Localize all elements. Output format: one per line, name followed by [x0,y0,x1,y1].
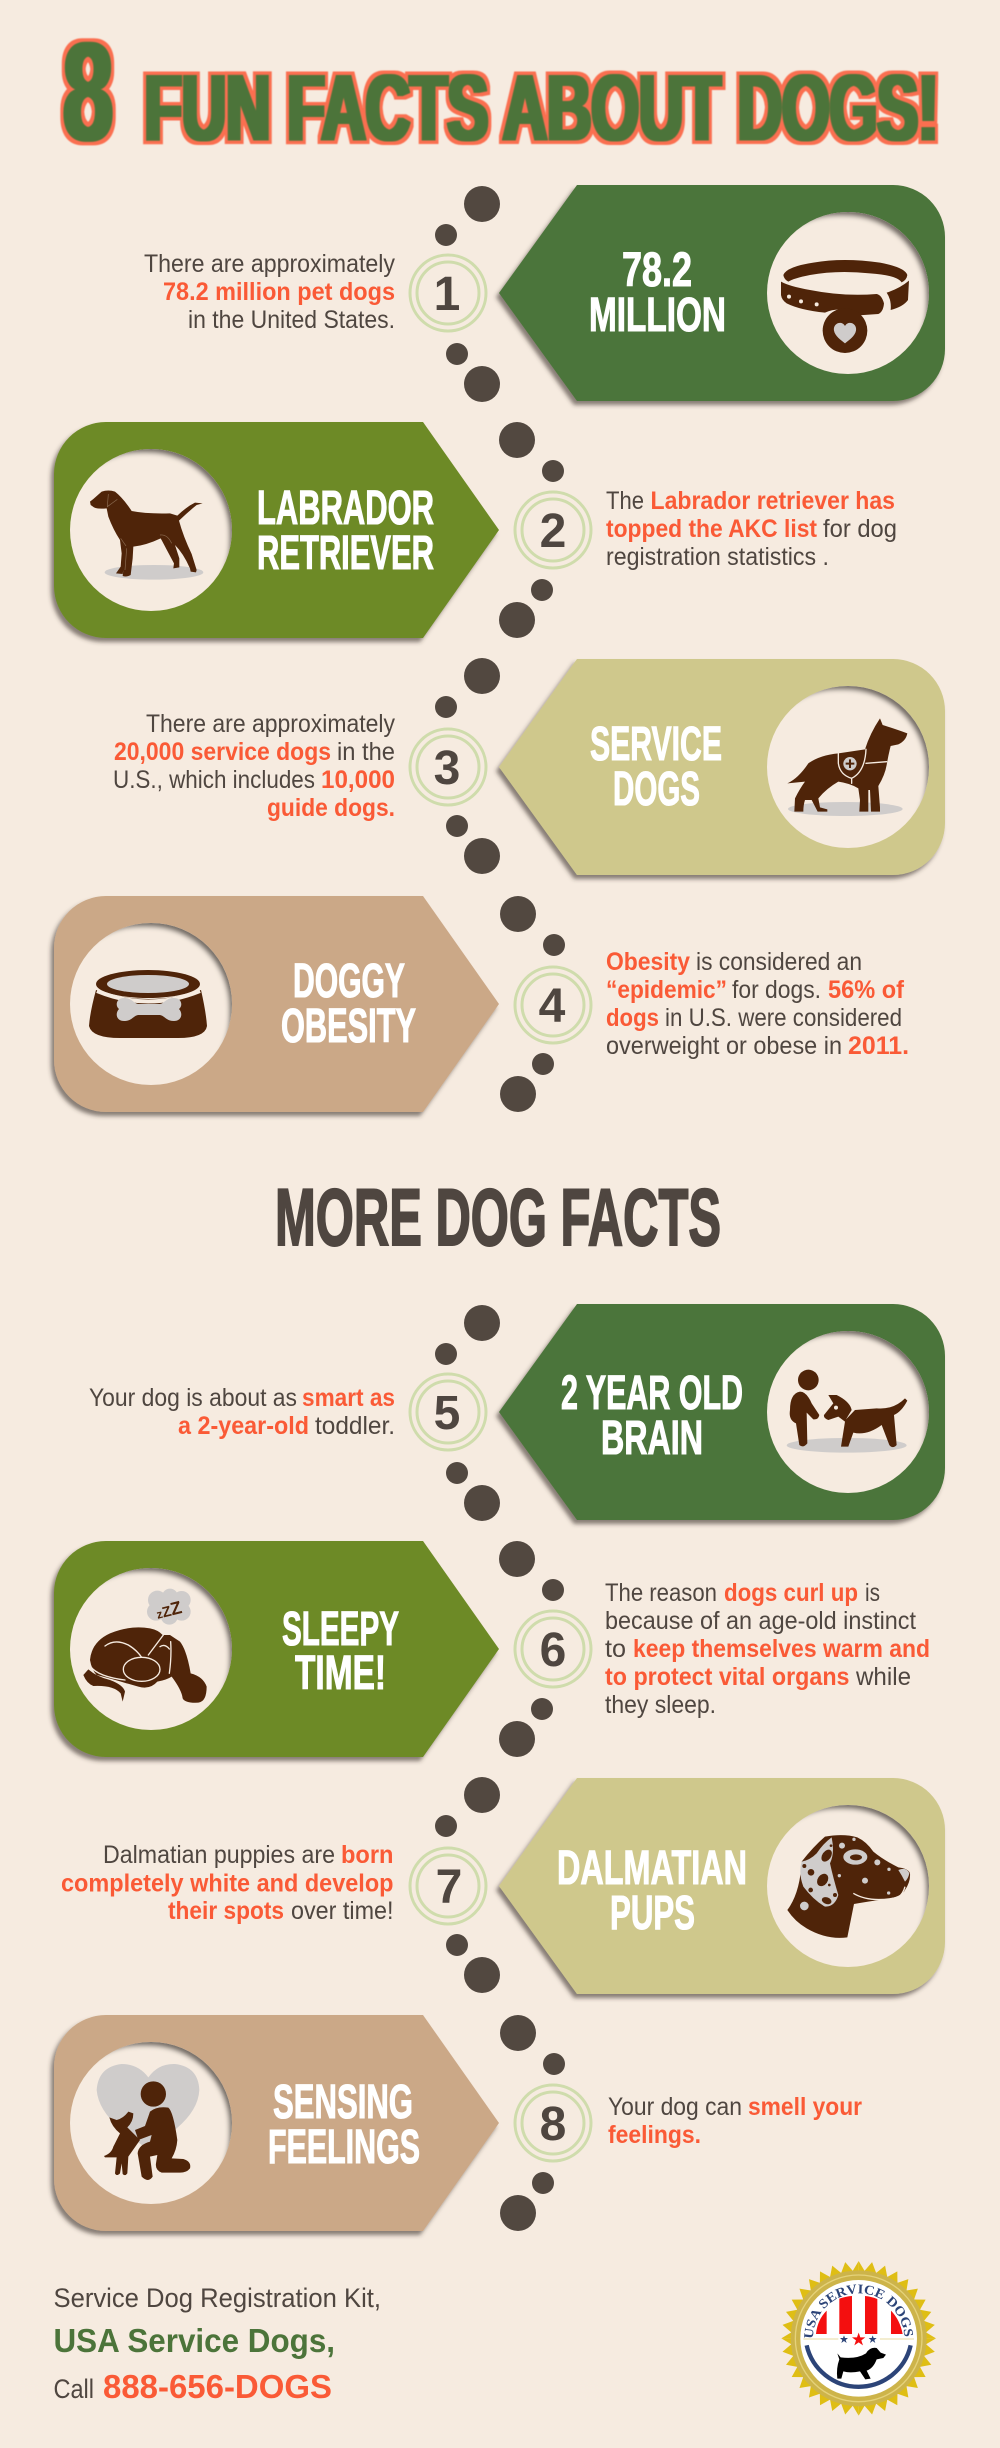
icon: child and dog [787,1370,907,1453]
panel label: PUPS [610,1887,695,1940]
dots 6 [499,1541,564,1757]
fact text 3: guide dogs. [267,794,395,822]
fact text 4: in U.S. were considered [665,1004,902,1032]
fact text 2: topped the AKC list [606,515,818,543]
fact text 6: while [855,1663,911,1691]
title [63,13,938,170]
fact text 4: 2011. [848,1032,909,1060]
panel: sensing feelings [54,2015,499,2231]
panel: 2 year old brain [499,1304,945,1520]
panel label: OBESITY [281,1000,416,1053]
dots 4 [500,896,565,1112]
panel: service dogs [499,659,945,875]
panel: 78.2 million [499,185,945,401]
number badge 8 [515,2085,591,2161]
panel label [590,718,722,816]
footer contact text: USA Service Dogs, [54,2322,335,2359]
fact text 2: for dog [823,515,897,543]
fact text 6: The reason [605,1579,717,1607]
panel: sleepy time [54,1541,499,1757]
fact text 8: smell your [748,2093,862,2121]
panel label: TIME! [295,1647,386,1700]
fact text 8: Your dog can [608,2093,742,2121]
fact text 1 [144,250,395,334]
fact text 6: they sleep. [605,1691,716,1719]
panel label [257,482,434,580]
panel label [557,1842,747,1940]
number badge 1: 1 [434,268,460,321]
panel label: BRAIN [601,1412,703,1465]
fact text 7: Dalmatian puppies are [103,1841,335,1869]
panel label [282,1603,399,1700]
number badge 7 [410,1848,486,1924]
fact text 2: The [606,487,644,515]
number badge 6: 6 [540,1624,566,1677]
fact text 3: in the [337,738,395,766]
number badge 8: 8 [540,2098,566,2151]
number badge 2 [515,492,591,568]
fact text 6: to [605,1635,626,1663]
fact text 7: over time! [291,1897,394,1925]
icon: labrador [90,490,203,580]
fact text 3: U.S., which includes [113,766,315,794]
fact text 1: There are approximately [144,250,395,278]
dots 3 [435,658,500,874]
icon: sleeping dog: zZZ [154,1597,184,1623]
panel label: RETRIEVER [257,527,434,580]
fact text 4: for dogs. [732,976,821,1004]
fact text 2: registration statistics . [606,543,829,571]
panel: doggy obesity [54,896,499,1112]
icon: sleeping dog [83,1589,207,1703]
fact text 8 [608,2093,862,2149]
fact text 2 [606,487,897,571]
panel label: 78.2 [622,244,692,297]
fact text 5: smart as [302,1384,395,1412]
fact text 5: toddler. [315,1412,395,1440]
number badge 1 [410,255,486,331]
panel label: FEELINGS [268,2121,420,2174]
number badge 3: 3 [434,742,460,795]
number badge 4 [515,967,591,1043]
number badge 3 [410,729,486,805]
icon: bowl [89,970,207,1038]
fact text 4: is considered an [696,948,862,976]
fact text 3 [113,710,395,822]
dots 7 [435,1777,500,1993]
footer contact text: Service Dog Registration Kit, [54,2283,381,2313]
fact text 4: overweight or obese in [606,1032,842,1060]
fact text 4 [606,948,909,1060]
fact text 6: dogs curl up [724,1579,858,1607]
fact text 6: keep themselves warm and [633,1635,930,1663]
panel label: SERVICE [590,718,722,771]
fact text 6 [605,1579,930,1719]
dots 5 [435,1305,500,1521]
panel label: SLEEPY [282,1603,399,1656]
dots 8 [500,2015,565,2231]
panel label [281,955,416,1053]
fact text 4: Obesity [606,948,690,976]
icon: service dog [787,718,907,816]
number badge 5: 5 [434,1387,460,1440]
fact text 5 [89,1384,395,1440]
dots 1 [435,186,500,402]
panel label: MILLION [589,289,726,342]
number badge 6 [515,1611,591,1687]
fact text 1: in the United States. [188,306,395,334]
fact text 3: 20,000 service dogs [114,738,331,766]
footer contact text: 888-656-DOGS [103,2368,332,2405]
panel label: LABRADOR [257,482,434,535]
number badge 7: 7 [436,1861,462,1914]
fact text 6: is [865,1579,880,1607]
footer contact text [54,2283,381,2405]
fact text 3: There are approximately [146,710,395,738]
panel label [589,244,726,342]
fact text 5: a 2-year-old [178,1412,309,1440]
panel label: SENSING [273,2076,413,2129]
number badge 2: 2 [540,505,566,558]
panel label: DALMATIAN [557,1842,747,1895]
number badge 4: 4 [539,980,566,1033]
fact text 3: 10,000 [321,766,395,794]
number badge 5 [410,1374,486,1450]
panel label [561,1367,743,1465]
fact text 7: their spots [168,1897,284,1925]
seal: USA Service Dogs [782,2261,936,2416]
fact text 7: completely white and develop [61,1870,394,1898]
panel label: 2 YEAR OLD [561,1367,743,1420]
fact text 4: “epidemic” [606,976,727,1004]
fact text 4: dogs [606,1004,659,1032]
panel label: DOGS [613,763,700,816]
title: 8 [63,13,113,170]
panel label: DOGGY [293,955,405,1008]
fact text 7 [61,1841,394,1925]
panel: labrador retriever [54,422,499,638]
fact text 6: because of an age-old instinct [605,1607,916,1635]
dots 2 [499,422,564,638]
fact text 1: 78.2 million pet dogs [163,278,395,306]
fact text 7: born [341,1841,394,1869]
fact text 4: 56% of [828,976,905,1004]
panel label [268,2076,420,2174]
icon: person hugging dog with heart [97,2064,199,2180]
icon: collar [781,260,909,353]
seal: USA Service Dogs: USA SERVICE DOGS [804,2284,913,2338]
icon: dalmatian [787,1835,910,1938]
panel: dalmatian pups [499,1778,945,1994]
fact text 6: to protect vital organs [605,1663,850,1691]
fact text 5: Your dog is about as [89,1384,297,1412]
fact text 2: Labrador retriever has [650,487,895,515]
fact text 8: feelings. [608,2121,701,2149]
heading: more dog facts: MORE DOG FACTS [275,1173,721,1263]
footer contact text: Call [54,2374,94,2404]
